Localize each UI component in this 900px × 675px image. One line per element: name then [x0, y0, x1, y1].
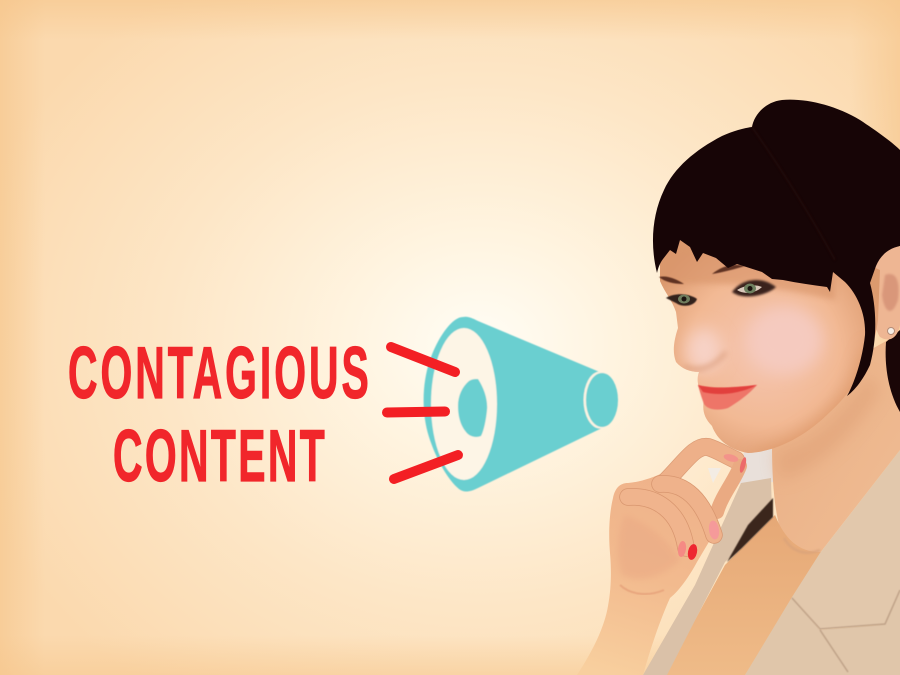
eyes	[666, 280, 776, 306]
gap between fingers	[708, 468, 721, 483]
palm shading	[618, 515, 680, 579]
palm and wrist	[577, 472, 716, 675]
jacket lower panel	[745, 585, 900, 675]
backdrop patch behind neck	[738, 440, 775, 484]
hair behind neck	[886, 330, 900, 412]
jacket lapel	[792, 450, 900, 629]
forehead shadow	[678, 255, 836, 300]
nail	[708, 520, 720, 540]
megaphone mouth	[431, 328, 497, 480]
megaphone back ring	[584, 372, 616, 428]
nail	[686, 543, 699, 561]
jacket left panel	[643, 478, 772, 675]
ring finger	[628, 497, 686, 548]
megaphone body	[424, 317, 602, 492]
face	[660, 228, 880, 453]
icon: megaphone	[424, 317, 618, 492]
jaw shadow	[756, 354, 862, 452]
inner ear shading	[882, 274, 899, 311]
upper lip	[698, 385, 757, 394]
ear	[871, 246, 900, 339]
upper finger outline	[665, 447, 736, 482]
lapel seam	[792, 590, 900, 672]
title: contagious content: CONTENT	[113, 414, 325, 497]
megaphone back cap	[586, 373, 618, 427]
megaphone inner cone	[458, 379, 487, 437]
hand	[577, 447, 740, 675]
woman portrait	[577, 100, 900, 675]
title: contagious content	[68, 331, 369, 497]
pointing finger	[717, 466, 740, 512]
lips	[698, 385, 757, 410]
neck shadow under jaw	[775, 375, 880, 480]
nose highlight	[686, 328, 722, 372]
middle finger outline	[660, 484, 714, 535]
hair	[653, 100, 900, 396]
chest	[665, 515, 822, 675]
title: contagious content: CONTAGIOUS	[68, 331, 369, 414]
right eye	[732, 280, 776, 296]
jacket shadow	[727, 498, 773, 562]
collarbone shading	[784, 538, 820, 553]
middle finger	[660, 484, 714, 535]
eyebrows	[659, 265, 745, 284]
cheek blush	[747, 306, 823, 374]
fingernails	[677, 453, 747, 561]
hair sheen	[752, 127, 835, 260]
face shading	[678, 255, 862, 452]
nail	[723, 453, 739, 463]
wrist crease	[620, 585, 664, 594]
nail	[739, 457, 747, 473]
earring	[888, 328, 894, 334]
upper finger	[665, 447, 736, 482]
left eye	[666, 294, 697, 306]
icon: sound lines	[387, 347, 458, 479]
nail	[677, 541, 687, 557]
nose shadow	[684, 352, 726, 369]
neck	[765, 340, 900, 554]
ring finger outline	[628, 497, 686, 548]
